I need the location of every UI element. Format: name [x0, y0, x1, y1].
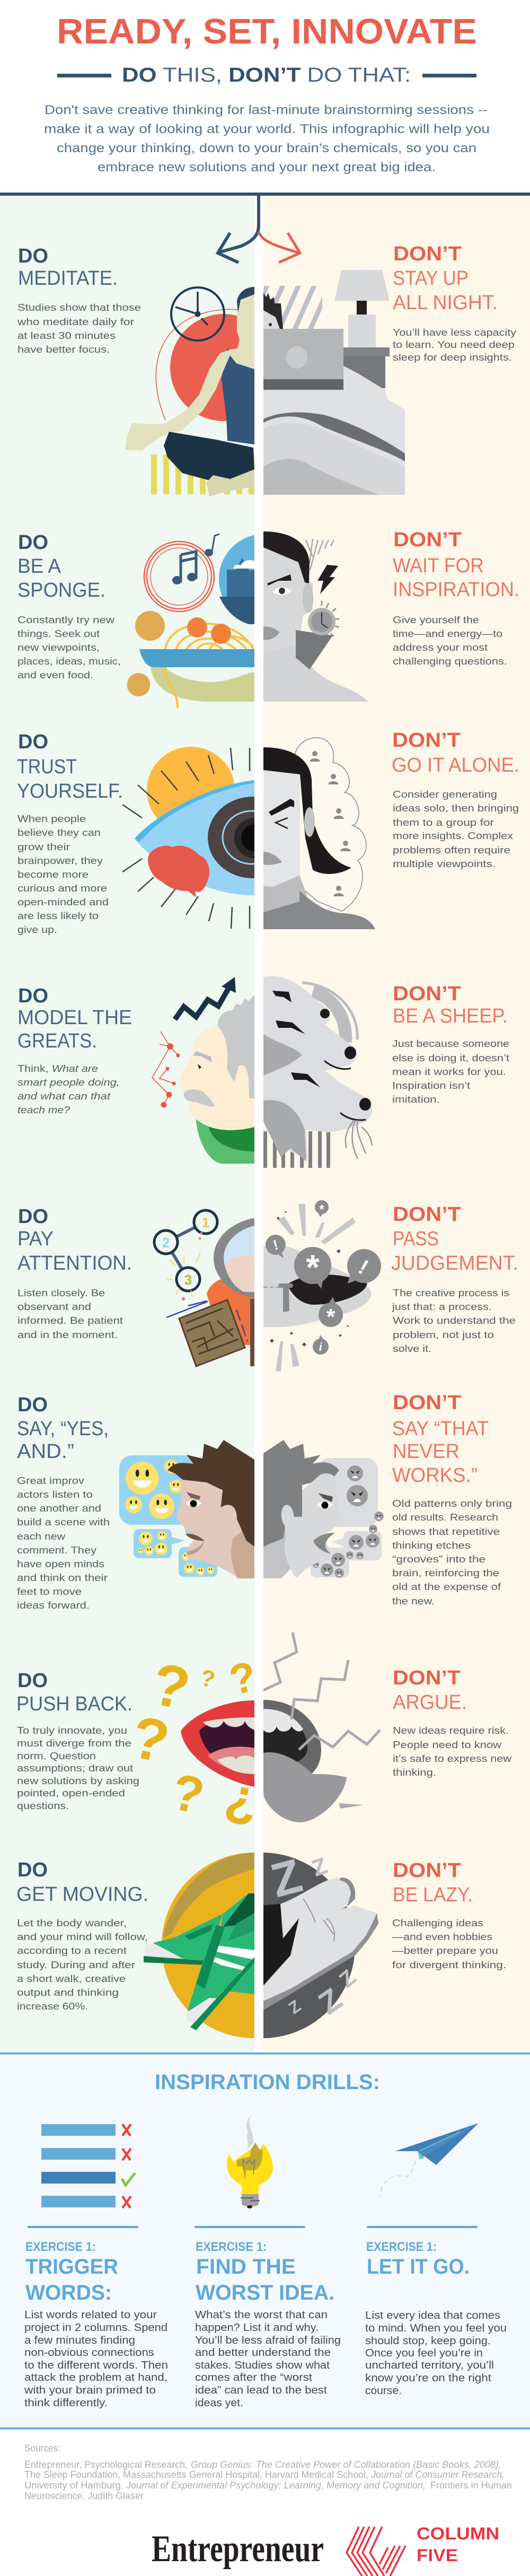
icon: broken bulb — [227, 2114, 273, 2208]
top band — [0, 193, 530, 196]
text block: it’s safe to express new — [393, 1753, 512, 1764]
heading: DON’T — [393, 529, 462, 551]
text block: who meditate daily for — [17, 316, 134, 327]
icon: word list — [41, 2124, 135, 2208]
section 4 do: model the greats — [17, 977, 254, 1164]
heading: JUDGEMENT. — [391, 1252, 518, 1274]
text block: Let the body wander, — [17, 1917, 127, 1928]
heading — [17, 1206, 132, 1274]
heading — [17, 531, 105, 601]
rules — [28, 2226, 478, 2228]
text block: curious and more — [17, 883, 107, 894]
text block: increase 60%. — [17, 2001, 88, 2012]
heading — [393, 243, 498, 314]
text block: Give yourself the — [393, 614, 479, 625]
heading: WAIT FOR — [393, 555, 484, 577]
heading: SAY “THAT — [392, 1418, 489, 1440]
section 3 don't: go it alone — [263, 729, 519, 929]
text block: and think on their — [17, 1572, 108, 1583]
text block: problem, not just to — [393, 1329, 494, 1340]
text block: thinking. — [393, 1767, 436, 1778]
illustration: magnifier and maze: 1 — [202, 1215, 209, 1230]
exercise column 3: course. — [365, 2385, 402, 2397]
exercise column 1 — [24, 2240, 168, 2409]
text block: brainpower, they — [17, 855, 103, 866]
text block: the new. — [392, 1595, 435, 1606]
exercise column 2: ideas yet. — [195, 2397, 243, 2409]
intro text: embrace new solutions and your next great big idea. — [98, 160, 436, 174]
text block: to learn. You need deep — [393, 339, 515, 350]
text block: You’ll have less capacity — [393, 327, 517, 338]
text block: observant and — [17, 1301, 91, 1312]
text block: Work to understand the — [393, 1315, 516, 1326]
illustration: man with clock and bolt — [263, 531, 368, 702]
heading: SPONGE. — [17, 579, 105, 601]
exercise column 2: EXERCISE 1: — [196, 2240, 267, 2254]
heading: TRUST — [17, 756, 77, 778]
text block: informed. Be patient — [17, 1315, 123, 1326]
section 8 don't: be lazy — [263, 1853, 505, 2038]
heading: ATTENTION. — [17, 1252, 132, 1274]
illustration: woman with thought cloud — [263, 738, 375, 929]
heading: DO — [17, 1670, 48, 1692]
text block: thinking etches — [392, 1540, 471, 1551]
exercise column 1: WORDS: — [25, 2281, 112, 2304]
text block: grow their — [17, 841, 70, 852]
text block: and in the moment. — [17, 1329, 118, 1340]
text block: challenging questions. — [393, 656, 507, 667]
heading — [16, 1670, 132, 1715]
illustration: open mouth and question marks: ? — [219, 1773, 262, 1837]
text block — [17, 813, 109, 935]
text block: Old patterns only bring — [392, 1498, 512, 1509]
text block: teach me? — [17, 1104, 70, 1115]
heading — [393, 983, 508, 1027]
exercise column 3: EXERCISE 1: — [366, 2240, 437, 2254]
exercise column 3: should stop, keep going. — [365, 2335, 491, 2347]
illustration: music, city, food — [127, 534, 254, 708]
text block: must diverge from the — [17, 1737, 131, 1749]
sources: University of Hamburg, — [24, 2480, 123, 2491]
text block: give up. — [17, 924, 57, 935]
heading: ALL NIGHT. — [393, 292, 498, 314]
heading: DON’T — [393, 1392, 461, 1414]
text block: ideas forward. — [17, 1600, 90, 1611]
text block — [17, 1917, 148, 2012]
text block: open-minded and — [17, 896, 109, 907]
sources: Neuroscience, Judith Glaser — [24, 2491, 144, 2501]
text block — [17, 1063, 120, 1115]
text block: and even food. — [17, 669, 93, 680]
text block: them to a group for — [393, 817, 494, 828]
sources — [24, 2443, 512, 2501]
text block: actors listen to — [17, 1489, 93, 1500]
illustration: einstein — [152, 977, 254, 1164]
text block: address your most — [393, 642, 488, 653]
heading: GO IT ALONE. — [392, 754, 519, 776]
heading: BE A — [17, 555, 61, 578]
illustration: meditating man — [125, 286, 254, 496]
heading: BE A SHEEP. — [393, 1005, 508, 1027]
illustration: open mouth and question marks: ? — [198, 1665, 217, 1693]
text block: When people — [17, 813, 86, 824]
text block: —and even hobbies — [392, 1931, 492, 1942]
subtitle — [57, 64, 476, 86]
heading: DON’T — [392, 729, 461, 752]
heading — [17, 985, 132, 1052]
heading: MODEL THE — [17, 1007, 132, 1029]
exercise column 1: List words related to your — [24, 2309, 157, 2321]
exercise column 1: non-obvious connections — [24, 2347, 154, 2359]
panel: don't background — [263, 196, 530, 2053]
exercise column 2: happen? List it and why. — [195, 2322, 319, 2334]
text block: a short walk, creative — [17, 1973, 126, 1984]
text block — [392, 1917, 506, 1970]
text block: To truly innovate, you — [17, 1725, 127, 1736]
illustration: sleeping feet: Z — [334, 1964, 360, 1993]
text block: comment. They — [17, 1544, 97, 1556]
arrow: do — [218, 194, 259, 263]
text block — [392, 1498, 512, 1606]
text block: have open minds — [17, 1558, 104, 1569]
exercise column 2: and better understand the — [195, 2347, 331, 2359]
text block — [393, 327, 517, 363]
text block: brain, reinforcing the — [392, 1567, 499, 1578]
text block: mean it works for you. — [392, 1066, 506, 1077]
heading: DON’T — [393, 983, 461, 1005]
illustration: speech bubbles and zipper mouth: ! — [355, 1255, 372, 1279]
text block: ideas solo, then bringing — [393, 802, 519, 814]
heading: DO — [17, 1394, 48, 1416]
illustration: open mouth and question marks: ? — [167, 1763, 209, 1825]
intro text: change your thinking, down to your brain’s chemicals, so you can — [57, 141, 476, 155]
heading — [391, 1203, 518, 1274]
sources: Frontiers in Human — [430, 2480, 512, 2491]
section 6 do: say yes and — [17, 1394, 254, 1611]
heading: DO — [18, 731, 48, 753]
section 6 don't: say that never works — [263, 1392, 512, 1606]
section 1 do: meditate — [17, 248, 254, 496]
text block: are less likely to — [17, 910, 99, 921]
sources: Journal of Consumer Research, — [370, 2469, 505, 2480]
heading: DO — [18, 985, 48, 1007]
illustration: sheep — [263, 976, 372, 1168]
heading — [392, 729, 519, 776]
text block: time—and energy—to — [393, 628, 502, 639]
heading: WORKS.” — [392, 1464, 478, 1487]
sources: Entrepreneur, Psychological Research, — [24, 2459, 188, 2470]
intro text — [44, 103, 490, 174]
illustration: sleeping feet — [263, 1853, 378, 2038]
text block: places, ideas, music, — [17, 656, 121, 667]
exercise column 3: Once you feel you’re in — [365, 2347, 483, 2359]
text block: smart people doing, — [17, 1077, 120, 1088]
illustration: open mouth and question marks: ? — [146, 1650, 196, 1723]
heading — [16, 1859, 148, 1906]
section 2 do: be a sponge — [17, 534, 254, 708]
text block: and your mind will follow, — [17, 1931, 148, 1942]
sources: Journal of Experimental Psychology: Learning, Memory and Cognition, — [126, 2480, 426, 2491]
illustration: speech bubbles and zipper mouth: * — [326, 1304, 335, 1329]
text block: Just because someone — [392, 1038, 509, 1049]
intro text: Don't save creative thinking for last-minute brainstorming sessions -- — [45, 103, 488, 117]
text block — [393, 614, 507, 667]
exercise column 3: LET IT GO. — [367, 2255, 470, 2278]
illustration: speech bubbles and zipper mouth: ! — [271, 1236, 280, 1253]
text block: —better prepare you — [392, 1945, 498, 1956]
heading: YOURSELF. — [17, 780, 123, 802]
exercise column 3 — [365, 2240, 507, 2397]
text block: things. Seek out — [17, 628, 100, 639]
text block: multiple viewpoints. — [393, 858, 496, 869]
illustration: magnifier and maze — [153, 1209, 254, 1367]
text block: assumptions; draw out — [17, 1762, 133, 1774]
exercise column 1: TRIGGER — [25, 2255, 118, 2278]
heading: DO — [18, 531, 48, 554]
exercise column 2: FIND THE — [196, 2255, 296, 2278]
heading: DON’T — [393, 1859, 461, 1882]
heading: INSPIRATION. — [393, 579, 519, 601]
text block: Inspiration isn’t — [392, 1080, 470, 1091]
text block: old at the expense of — [392, 1581, 501, 1592]
logo: entrepreneur: Entrepreneur — [152, 2528, 324, 2570]
heading — [17, 1394, 109, 1463]
illustration: speech bubbles and zipper mouth: * — [319, 1202, 324, 1217]
text block — [17, 1725, 139, 1811]
illustration: open mouth and question marks: ? — [126, 1703, 175, 1776]
heading: PASS — [393, 1228, 439, 1250]
text block: old results. Research — [392, 1512, 498, 1523]
text block: new viewpoints, — [17, 642, 100, 653]
text block: sleep for deep insights. — [393, 352, 512, 363]
heading — [393, 1667, 467, 1714]
illustration: magnifier and maze: 3 — [184, 1272, 192, 1288]
text block: become more — [17, 869, 89, 880]
illustration: speech bubbles and zipper mouth — [263, 1200, 381, 1372]
text block: just that: a process. — [392, 1301, 492, 1312]
text block: pointed, open-ended — [17, 1787, 125, 1798]
exercise column 1: think differently. — [24, 2397, 108, 2409]
text block: The creative process is — [393, 1287, 509, 1298]
text block: and what can that — [17, 1090, 111, 1102]
text block: People need to know — [393, 1739, 502, 1750]
text block: problems often require — [393, 844, 510, 855]
text block: norm. Question — [17, 1750, 96, 1761]
exercise column 3: uncharted territory, you’ll — [365, 2360, 494, 2371]
text block: Studies show that those — [17, 302, 141, 313]
heading: AND.” — [17, 1440, 74, 1463]
text block: Consider generating — [393, 789, 497, 800]
text block: build a scene with — [17, 1516, 110, 1527]
section 8 do: get moving — [17, 1853, 254, 2038]
illustration: open mouth and question marks: ? — [225, 1653, 260, 1704]
exercise column 2: stakes. Studies show what — [195, 2360, 330, 2371]
text block: Constantly try new — [17, 614, 115, 625]
text block — [393, 789, 519, 869]
exercise column 3: to mind. When you feel you — [365, 2322, 507, 2334]
section 4 don't: be a sheep — [263, 976, 509, 1168]
intro text: make it a way of looking at your world. This infographic will help you — [44, 122, 490, 136]
sources: The Sleep Foundation, Massachusetts General Hospital, Harvard Medical School, — [24, 2469, 368, 2480]
text block: new solutions by asking — [17, 1775, 139, 1786]
exercise column 2: WORST IDEA. — [196, 2281, 334, 2304]
text block: Challenging ideas — [392, 1917, 483, 1928]
illustration: open mouth and question marks — [137, 1663, 254, 1824]
text block: solve it. — [393, 1343, 431, 1354]
exercise column 2: You’ll be less afraid of failing — [195, 2335, 341, 2346]
heading: DO — [18, 245, 48, 267]
text block — [17, 614, 121, 680]
heading: GREATS. — [17, 1030, 97, 1052]
section 7 don't: argue — [260, 1632, 512, 1822]
exercise column 1: EXERCISE 1: — [25, 2240, 96, 2254]
exercise column 1: attack the problem at hand, — [24, 2372, 167, 2383]
section 7 do: push back — [17, 1663, 254, 1824]
heading — [18, 245, 118, 290]
illustration: speech bubbles and zipper mouth: i — [318, 1340, 323, 1354]
illustration: sleeping feet: Z — [266, 1849, 307, 1908]
illustration: sleeping feet: Z — [285, 1996, 304, 2018]
illustration: eye and brain — [122, 747, 254, 929]
heading: MEDITATE. — [18, 267, 118, 290]
illustration: bedroom — [263, 270, 405, 495]
arrow: don't — [259, 232, 300, 263]
heading: NEVER — [393, 1440, 460, 1463]
section 1 don't: stay up all night — [263, 243, 517, 495]
text block: each new — [17, 1531, 66, 1542]
illustration: sleeping feet: Z — [312, 1981, 348, 2021]
text block: Think, What are — [17, 1063, 98, 1074]
text block — [17, 302, 141, 355]
text block: “grooves” into the — [392, 1553, 485, 1565]
section 3 do: trust yourself — [17, 734, 254, 935]
illustration: speech bubbles and zipper mouth: * — [306, 1247, 320, 1287]
text block: more insights. Complex — [393, 830, 514, 841]
heading — [392, 1392, 489, 1487]
logo: column five — [347, 2524, 499, 2576]
text block: Listen closely. Be — [17, 1287, 105, 1298]
heading: BE LAZY. — [393, 1884, 473, 1906]
heading: DON’T — [393, 243, 462, 265]
heading — [17, 731, 123, 802]
text block — [17, 1287, 123, 1340]
heading: STAY UP — [393, 267, 469, 290]
section 5 don't: pass judgement — [263, 1200, 518, 1372]
sources: Sources: — [24, 2443, 60, 2453]
heading: DO — [18, 1206, 48, 1228]
text block — [392, 1038, 509, 1105]
heading — [393, 529, 519, 601]
logo: column five: COLUMN — [417, 2524, 499, 2543]
text block — [392, 1287, 516, 1354]
text block: one another and — [17, 1503, 101, 1514]
text block: New ideas require risk. — [393, 1725, 509, 1736]
section 5 do: pay attention — [17, 1209, 254, 1367]
text block: at least 30 minutes — [17, 330, 116, 341]
exercise column 2: idea” can lead to the best — [195, 2385, 327, 2396]
illustration: smiling talker — [119, 1440, 254, 1578]
exercise column 1: with your brain primed to — [24, 2385, 156, 2396]
text block: for divergent thinking. — [392, 1959, 506, 1970]
heading: ARGUE. — [393, 1691, 467, 1714]
heading: GET MOVING. — [16, 1883, 148, 1906]
heading: INSPIRATION DRILLS: — [155, 2071, 380, 2094]
heading: DON’T — [393, 1203, 461, 1226]
section 2 don't: wait for inspiration — [263, 529, 519, 702]
exercise column 1: to the different words. Then — [24, 2360, 168, 2371]
text block: questions. — [17, 1800, 69, 1811]
subtitle: DO THIS, DON’T DO THAT: — [122, 64, 411, 86]
text block — [17, 1475, 110, 1611]
exercise column 3: List every idea that comes — [365, 2310, 500, 2321]
exercise column 2: comes after the “worst — [195, 2372, 312, 2383]
text block: Great improv — [17, 1475, 85, 1486]
panel: do background — [0, 196, 254, 2053]
heading: DON’T — [393, 1667, 461, 1689]
illustration: sleeping feet: Z — [308, 1853, 331, 1882]
exercise column 2: What’s the worst that can — [195, 2309, 328, 2321]
text block: else is doing it, doesn’t — [392, 1052, 509, 1063]
exercise column 3: know you’re on the right — [365, 2372, 491, 2384]
heading: PUSH BACK. — [16, 1693, 132, 1715]
text block: shows that repetitive — [392, 1526, 500, 1537]
illustration: negative talker — [263, 1440, 384, 1578]
illustration: magnifier and maze: 2 — [162, 1235, 170, 1251]
text block: output and thinking — [17, 1987, 119, 1998]
exercise column 2 — [195, 2240, 341, 2409]
text block: study. During and after — [17, 1959, 135, 1970]
icon: paper plane — [380, 2123, 479, 2196]
text block: have better focus. — [17, 344, 110, 355]
text block: believe they can — [17, 827, 101, 838]
panel: inspiration drills — [0, 2053, 530, 2429]
heading: SAY, “YES, — [17, 1418, 109, 1440]
illustration: shouting mouth and lightning — [260, 1632, 380, 1822]
text block: according to a recent — [17, 1945, 127, 1956]
text block — [393, 1725, 512, 1778]
illustration: green sneakers — [144, 1853, 254, 2038]
sources: Group Genius: The Creative Power of Collaboration (Basic Books, 2008), — [191, 2459, 501, 2470]
exercise column 1: a few minutes finding — [24, 2335, 135, 2346]
text block: feet to move — [17, 1586, 82, 1597]
exercise column 1: project in 2 columns. Spend — [24, 2322, 167, 2334]
heading: DO — [17, 1859, 48, 1881]
title: READY, SET, INNOVATE — [57, 12, 477, 51]
text block: imitation. — [392, 1094, 440, 1105]
heading: PAY — [17, 1228, 54, 1250]
heading — [393, 1859, 473, 1906]
logo: column five: FIVE — [417, 2546, 458, 2565]
